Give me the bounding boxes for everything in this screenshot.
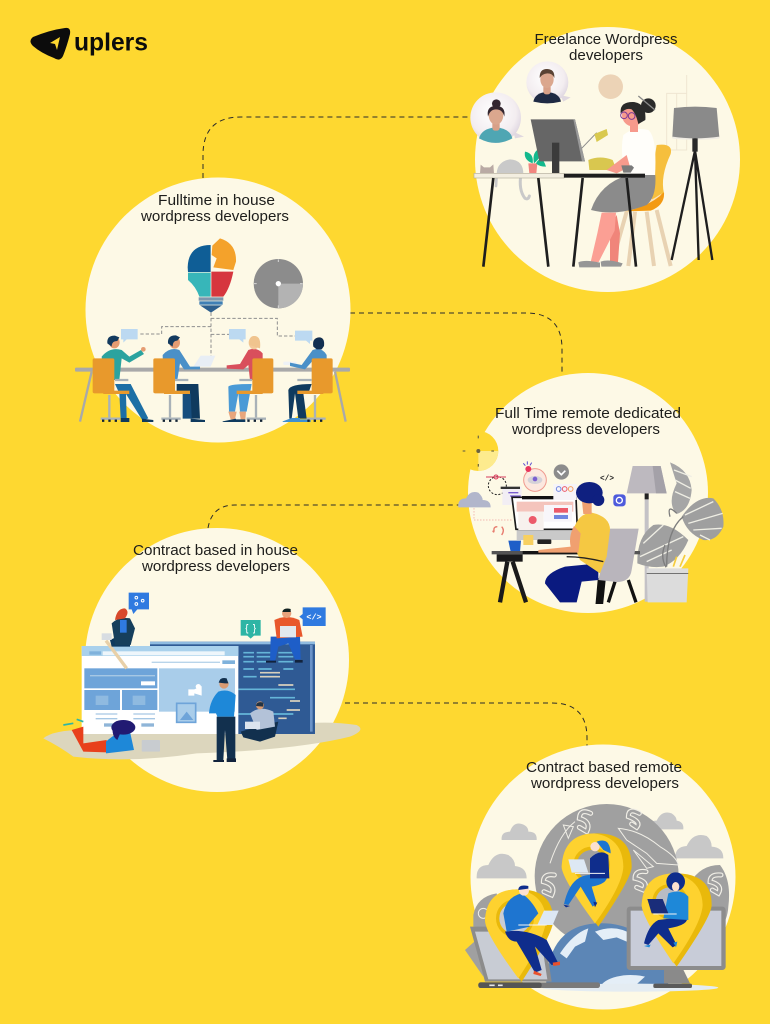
ground blob xyxy=(43,723,360,759)
panel: contract based in house wordpress developers xyxy=(43,528,360,792)
illustration: in-house team meeting xyxy=(75,238,350,422)
desk lamp arm xyxy=(582,133,597,148)
desk xyxy=(474,173,645,267)
grey globe and blobs xyxy=(465,804,729,977)
logo: uplers xyxy=(30,28,148,60)
label: contract in house xyxy=(133,543,298,575)
panel: contract based remote wordpress developers xyxy=(465,744,736,1010)
dotted pink trail xyxy=(474,508,513,520)
pin: center xyxy=(562,833,632,927)
man standing xyxy=(209,678,236,762)
label: full time remote: Full Time remote dedicated xyxy=(495,406,681,422)
pin: left xyxy=(485,889,553,982)
panel: full time remote dedicated wordpress developers xyxy=(458,373,724,613)
icon: eye target xyxy=(523,461,546,491)
map outlines and currency squiggles xyxy=(478,822,678,918)
illustration: remote contractors on pins xyxy=(465,804,729,992)
cat xyxy=(480,159,529,199)
avatar: man xyxy=(526,61,571,103)
connector: full time remote to contract in house xyxy=(208,505,460,528)
cloud xyxy=(458,492,491,507)
code panel xyxy=(150,642,315,734)
plant xyxy=(525,148,546,173)
icon: clock xyxy=(254,259,303,308)
floor lamp xyxy=(672,107,719,260)
shadow xyxy=(542,984,718,992)
label: freelance xyxy=(534,32,678,64)
icon: curly braces xyxy=(493,527,503,535)
woman xyxy=(578,96,656,267)
label: fulltime in house xyxy=(140,193,289,225)
icon: code tag: </> xyxy=(600,473,614,483)
label: fulltime in house: wordpress developers xyxy=(140,209,289,225)
icon: bezier curve xyxy=(486,475,506,495)
avatar: woman xyxy=(470,92,524,143)
illustration: remote developer at desk xyxy=(458,431,724,602)
person: blonde in red xyxy=(223,336,273,422)
logo: uplers: uplers xyxy=(74,28,148,56)
window outline xyxy=(667,75,687,150)
chair xyxy=(617,145,671,266)
currency squiggles inner xyxy=(543,811,721,895)
person: blue shirt with laptop xyxy=(153,335,215,422)
plant xyxy=(637,462,724,602)
label: contract remote: wordpress developers xyxy=(530,776,679,792)
monitor xyxy=(512,484,577,540)
icon: yellow clock xyxy=(458,431,498,471)
man on top of code panel xyxy=(266,609,303,663)
label: full time remote xyxy=(495,406,681,438)
table xyxy=(75,368,350,422)
laptop xyxy=(470,927,600,988)
label: fulltime in house: Fulltime in house xyxy=(158,193,275,209)
icon: gear badge xyxy=(613,494,626,506)
speech bubbles xyxy=(121,329,312,344)
icon: chevron xyxy=(554,464,569,480)
dashed network xyxy=(138,313,295,357)
browser window xyxy=(82,646,238,734)
currency squiggles outer xyxy=(543,811,721,895)
woman with red hair xyxy=(102,608,135,668)
person: left xyxy=(503,885,560,976)
connector: fulltime in house to freelance xyxy=(203,117,472,178)
woman xyxy=(538,482,610,602)
icon: code document xyxy=(501,487,522,505)
bubble: code: </> xyxy=(306,613,322,622)
panel: freelance wordpress developers xyxy=(470,27,740,292)
illustration: contract team with website xyxy=(43,593,360,762)
label: contract in house: wordpress developers xyxy=(141,559,290,575)
label: contract remote xyxy=(526,760,682,792)
connector: contract in house to contract remote xyxy=(345,703,587,746)
mug and note xyxy=(508,535,551,552)
illustration: freelancer at desk xyxy=(470,61,719,267)
person: center xyxy=(563,841,611,907)
bubble: share xyxy=(129,593,149,614)
desk xyxy=(492,551,640,602)
connector: fulltime in house to full time remote xyxy=(350,313,562,375)
label: freelance: developers xyxy=(569,48,643,64)
label: freelance: Freelance Wordpress xyxy=(534,32,678,48)
icon: puzzle light bulb xyxy=(188,238,236,313)
bubble: braces xyxy=(241,620,261,639)
label: contract in house: Contract based in house xyxy=(133,543,298,559)
desktop monitor xyxy=(627,907,726,988)
person: right xyxy=(644,872,688,947)
monitor xyxy=(531,119,585,173)
man sitting xyxy=(241,701,278,742)
clouds xyxy=(477,813,723,878)
woman lying xyxy=(63,719,160,753)
pin: right xyxy=(642,873,712,967)
blue earth xyxy=(546,923,668,987)
bubble: braces: { } xyxy=(245,624,256,635)
bubble: code xyxy=(299,607,326,626)
person: teal shirt xyxy=(93,336,153,422)
chair xyxy=(597,529,639,602)
icon: wall clock xyxy=(598,74,623,99)
label: contract remote: Contract based remote xyxy=(526,760,682,776)
floor lamp xyxy=(627,466,667,602)
panel: fulltime in house wordpress developers xyxy=(75,178,350,442)
label: full time remote: wordpress developers xyxy=(511,422,660,438)
person: bearded with notebook xyxy=(283,337,333,422)
